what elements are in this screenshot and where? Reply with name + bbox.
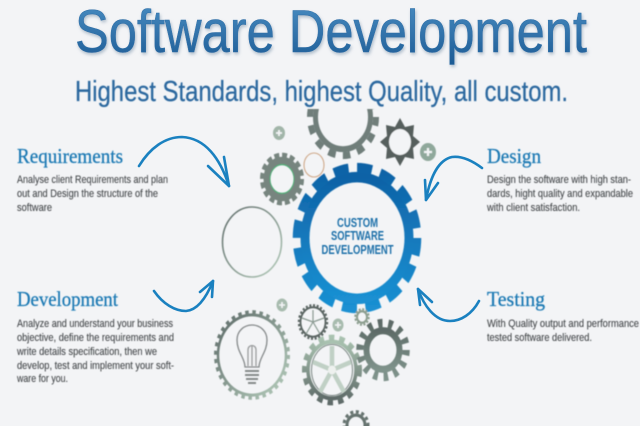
gear: spoked wheel gear — [304, 338, 360, 402]
panel: design — [486, 144, 633, 214]
gear: tiny gear — [355, 309, 369, 325]
text block: development: develop, test and implement your soft- — [17, 360, 174, 372]
text block: development: objective, define the requirements and — [17, 332, 174, 344]
heading: requirements: Requirements — [17, 144, 123, 168]
gear: small left gear — [262, 155, 302, 203]
gear: top half gear — [306, 108, 380, 160]
outline circle: large grey — [222, 207, 282, 277]
heading: testing: Testing — [487, 287, 545, 311]
arrow: design — [425, 157, 482, 200]
label: custom software development: DEVELOPMENT — [322, 243, 394, 257]
label: custom software development: CUSTOM — [337, 216, 378, 230]
label: custom software development: SOFTWARE — [331, 229, 384, 243]
text block: testing: tested software delivered. — [487, 332, 592, 344]
gear: dark star gear — [380, 118, 420, 166]
heading: development: Development — [17, 287, 118, 311]
outline circle: tan — [304, 153, 324, 177]
icon: plus lower right — [332, 318, 344, 332]
text block: testing — [487, 318, 639, 344]
panel: development — [16, 287, 174, 385]
gear: right dark gear — [360, 323, 406, 377]
icon: plus upper right — [420, 143, 436, 161]
icon: light bulb — [237, 325, 267, 383]
label: custom software development — [322, 216, 394, 257]
arrow: requirements — [139, 137, 229, 186]
heading: design: Design — [487, 144, 541, 168]
text block: development: write details specification, then we — [16, 346, 157, 358]
arrow: development — [154, 281, 213, 311]
text block: development — [16, 318, 174, 385]
text block: requirements: out and Design the structure of the — [17, 188, 158, 200]
icon: plus upper left — [273, 126, 285, 140]
gear: small dial gear — [299, 305, 327, 339]
panel: testing — [487, 287, 639, 344]
icon: plus lower left — [276, 298, 288, 312]
text block: requirements: software — [17, 202, 52, 214]
panel: requirements — [17, 144, 168, 214]
text block: development: Analyze and understand your business — [17, 318, 173, 330]
text block: requirements: Analyse client Requirements and plan — [17, 174, 168, 186]
arrow: testing — [418, 289, 479, 321]
text block: design — [486, 174, 633, 214]
gear cluster — [216, 78, 436, 426]
text block: development: ware for you. — [16, 373, 68, 385]
gear: central custom software development — [297, 168, 417, 308]
text block: requirements — [17, 174, 168, 214]
text block: design: with client satisfaction. — [486, 202, 580, 214]
gear: light bulb gear — [216, 312, 288, 398]
gear: bottom cut-off gear — [344, 412, 368, 426]
